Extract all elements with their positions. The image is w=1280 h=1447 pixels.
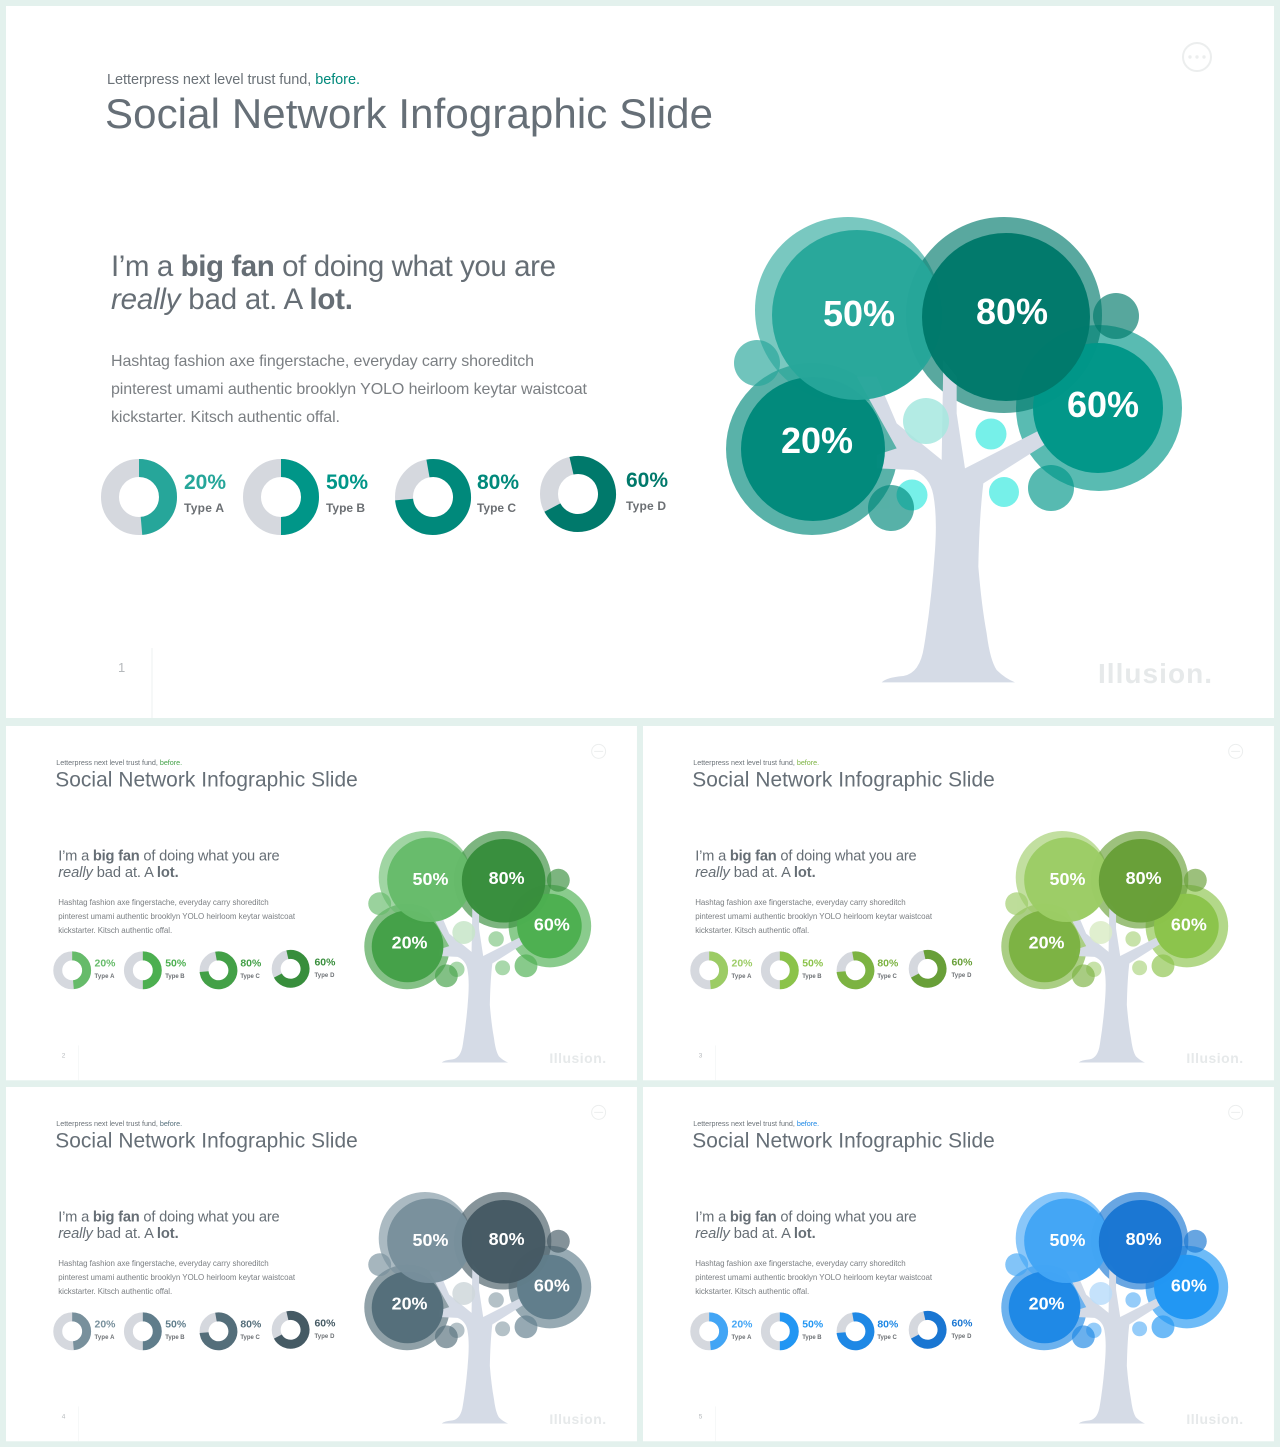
chart: donut type C 80%: Type C [240,1335,260,1341]
chart: donut type B 50% [128,956,186,985]
text: body paragraph [695,898,933,935]
panel: slide 5 blue [643,1087,1274,1441]
text: body paragraph: pinterest umami authentic brooklyn YOLO heirloom keytar waistcoat [695,1273,933,1282]
text: brand: Illusion. [1186,1411,1243,1427]
text: page number: 2 [62,1052,66,1059]
heading: statement: I’m a big fan of doing what you are [111,250,556,283]
panel: slide 2 green [6,726,637,1080]
heading: slide title: Social Network Infographic Slide [55,769,358,792]
heading: statement: I’m a big fan of doing what you are [695,1209,917,1225]
bubble 60% [1154,1255,1219,1319]
tree trunk [1066,902,1161,1063]
text: page number: 4 [62,1413,66,1420]
heading: statement: really bad at. A lot. [58,1226,179,1242]
tree trunk [429,1263,524,1424]
chart: donut type D 60%: Type D [626,499,666,513]
icon: more menu [1183,43,1211,71]
percent labels: 80% [1126,868,1162,888]
outer rings [364,1192,591,1350]
bubble 20% [741,377,885,521]
text: body paragraph: kickstarter. Kitsch authentic offal. [111,409,340,426]
panel: slide 4 blue grey [6,1087,637,1441]
bubble 50% [1024,837,1109,922]
chart: donut type A 20%: Type A [95,1335,115,1341]
percent labels: 50% [1050,869,1085,889]
chart: donut type D 60%: Type D [315,1334,335,1340]
text: body paragraph [695,1259,933,1296]
chart: donut type C 80%: Type C [240,974,260,980]
text: body paragraph: kickstarter. Kitsch authentic offal. [695,926,809,935]
text: eyebrow: Letterpress next level trust fund, before. [56,1119,182,1128]
light bubbles [1086,1282,1147,1338]
chart: donut type A 20%: Type A [732,1335,752,1341]
small bubbles [368,1230,570,1348]
chart: donut type B 50%: 50% [802,958,823,969]
text: brand: Illusion. [1186,1050,1243,1066]
percent labels: 20% [1029,932,1065,952]
outer rings [726,217,1182,535]
percent labels: 50% [823,293,895,334]
chart: donut type A 20%: 20% [95,1319,115,1330]
text: body paragraph: kickstarter. Kitsch authentic offal. [58,1287,172,1296]
chart: donut type C 80% [839,954,898,987]
heading: slide title: Social Network Infographic Slide [692,1130,995,1153]
chart: donut type D 60% [273,952,335,986]
percent labels: 60% [534,1276,570,1296]
chart: donut type A 20% [58,1317,115,1346]
chart: donut type C 80%: 80% [240,1319,261,1330]
text: eyebrow: Letterpress next level trust fund, before. [56,758,182,767]
text: brand: Illusion. [1098,658,1212,689]
chart: donut type B 50%: Type B [165,974,185,980]
percent labels [392,1229,570,1313]
chart: donut type B 50% [252,468,368,526]
percent labels: 60% [1171,915,1207,935]
text: page number: 5 [699,1413,703,1420]
heading: statement [58,1209,280,1242]
percent labels: 50% [413,1230,448,1250]
outer rings [364,831,591,989]
chart: donut type B 50%: 50% [802,1319,823,1330]
percent labels [1029,1229,1207,1313]
small bubbles [734,293,1139,531]
percent labels: 80% [489,868,525,888]
text: body paragraph: kickstarter. Kitsch authentic offal. [695,1287,809,1296]
chart: donut type A 20%: Type A [184,501,224,515]
small bubbles [1005,1230,1207,1348]
chart: donut type C 80%: 80% [877,958,898,969]
chart: donut type D 60%: 60% [626,469,668,492]
percent labels: 20% [1029,1293,1065,1313]
chart: donut type C 80% [202,954,261,987]
heading: statement: really bad at. A lot. [695,1226,816,1242]
chart: tree of percentages [726,217,1182,682]
heading: statement [695,848,917,881]
tree trunk [857,360,1047,682]
panel: slide 1 teal (large) [6,6,1274,718]
bubble 20% [1009,1272,1080,1343]
percent labels: 20% [781,420,853,461]
chart: tree of percentages [364,1192,591,1424]
chart: donut type A 20%: 20% [95,958,115,969]
text: body paragraph [111,353,588,426]
chart: donut type D 60%: 60% [952,1318,972,1329]
chart: tree of percentages [364,831,591,1063]
chart: donut type D 60%: 60% [952,957,972,968]
bubble 20% [372,1272,443,1343]
tree trunk [429,902,524,1063]
bubble 80% [922,233,1090,401]
chart: donut type B 50%: 50% [326,471,368,494]
bubble 20% [1009,911,1080,982]
chart: donut type A 20%: 20% [732,1319,752,1330]
chart: donut type B 50% [765,956,823,985]
icon: more menu [1229,1105,1243,1119]
percent labels: 80% [1126,1229,1162,1249]
percent labels: 80% [489,1229,525,1249]
text: eyebrow: Letterpress next level trust fund, before. [107,72,360,88]
percent labels [781,291,1139,461]
light bubbles [896,398,1019,510]
bubble 60% [1154,894,1219,958]
chart: donut type C 80%: 80% [240,958,261,969]
chart: donut type A 20% [58,956,115,985]
bubble 50% [387,1198,472,1283]
chart: donut type C 80%: 80% [477,471,519,494]
text: page number: 3 [699,1052,703,1059]
chart: donut type A 20%: Type A [95,974,115,980]
chart: donut type B 50% [765,1317,823,1346]
panel: slide 3 light green [643,726,1274,1080]
percent labels: 60% [1171,1276,1207,1296]
text: body paragraph: pinterest umami authentic brooklyn YOLO heirloom keytar waistcoat [111,381,588,398]
bubble 50% [387,837,472,922]
chart: donut type A 20%: Type A [732,974,752,980]
percent labels [392,868,570,952]
icon: more menu [1229,744,1243,758]
outer rings [1001,831,1228,989]
text: body paragraph: Hashtag fashion axe fingerstache, everyday carry shoreditch [111,353,534,370]
text: body paragraph: Hashtag fashion axe fingerstache, everyday carry shoreditch [58,1259,269,1268]
chart: donut type C 80% [202,1315,261,1348]
small bubbles [368,869,570,987]
text: eyebrow: Letterpress next level trust fund, before. [693,758,819,767]
chart: donut type B 50%: Type B [802,1335,822,1341]
chart: donut type A 20%: 20% [184,471,226,494]
chart: donut type D 60%: Type D [952,973,972,979]
chart: donut type D 60%: Type D [315,973,335,979]
heading: slide title: Social Network Infographic Slide [692,769,995,792]
chart: donut type B 50%: Type B [165,1335,185,1341]
chart: donut type A 20%: 20% [732,958,752,969]
text: body paragraph: Hashtag fashion axe fingerstache, everyday carry shoreditch [695,898,906,907]
heading: slide title: Social Network Infographic Slide [55,1130,358,1153]
percent labels: 20% [392,1293,428,1313]
text: eyebrow: Letterpress next level trust fund, before. [693,1119,819,1128]
chart: donut type A 20% [695,1317,752,1346]
chart: donut type B 50%: Type B [802,974,822,980]
chart: donut type C 80%: Type C [877,974,897,980]
chart: donut type D 60% [273,1313,335,1347]
chart: tree of percentages [1001,1192,1228,1424]
bubble 60% [517,894,582,958]
chart: donut type D 60%: 60% [315,957,335,968]
heading: slide title: Social Network Infographic Slide [105,90,713,137]
heading: statement: I’m a big fan of doing what you are [58,848,280,864]
chart: tree of percentages [1001,831,1228,1063]
percent labels: 80% [976,291,1048,332]
text: body paragraph: pinterest umami authentic brooklyn YOLO heirloom keytar waistcoat [58,1273,296,1282]
small bubbles [1005,869,1207,987]
text: page number: 1 [118,660,125,675]
icon: more menu [592,744,606,758]
chart: donut type D 60%: 60% [315,1318,335,1329]
chart: donut type D 60% [543,459,668,529]
chart: donut type C 80%: Type C [877,1335,897,1341]
text: body paragraph [58,1259,296,1296]
text: body paragraph: pinterest umami authentic brooklyn YOLO heirloom keytar waistcoat [695,912,933,921]
bubble 80% [462,1200,545,1284]
percent labels: 20% [392,932,428,952]
bubble 80% [462,839,545,923]
chart: donut type C 80% [839,1315,898,1348]
bubble 80% [1099,1200,1182,1284]
light bubbles [1086,921,1147,977]
bubble 60% [517,1255,582,1319]
text: body paragraph [58,898,296,935]
percent labels: 50% [413,869,448,889]
chart: donut type C 80% [399,463,519,531]
heading: statement [111,250,556,316]
light bubbles [449,1282,510,1338]
chart: donut type D 60% [910,952,972,986]
heading: statement: really bad at. A lot. [58,865,179,881]
heading: statement: I’m a big fan of doing what you are [58,1209,280,1225]
chart: donut type B 50% [128,1317,186,1346]
text: body paragraph: kickstarter. Kitsch authentic offal. [58,926,172,935]
bubble 50% [1024,1198,1109,1283]
percent labels: 60% [534,915,570,935]
text: body paragraph: pinterest umami authentic brooklyn YOLO heirloom keytar waistcoat [58,912,296,921]
chart: donut type A 20% [695,956,752,985]
chart: donut type C 80%: 80% [877,1319,898,1330]
chart: donut type B 50%: Type B [326,501,365,515]
chart: donut type A 20% [110,468,226,526]
text: brand: Illusion. [549,1411,606,1427]
text: body paragraph: Hashtag fashion axe fingerstache, everyday carry shoreditch [695,1259,906,1268]
chart: donut type B 50%: 50% [165,958,186,969]
bubble 60% [1033,343,1163,473]
tree trunk [1066,1263,1161,1424]
text: body paragraph: Hashtag fashion axe fingerstache, everyday carry shoreditch [58,898,269,907]
percent labels: 50% [1050,1230,1085,1250]
heading: statement: really bad at. A lot. [111,283,353,316]
heading: statement [695,1209,917,1242]
bubble 20% [372,911,443,982]
text: brand: Illusion. [549,1050,606,1066]
light bubbles [449,921,510,977]
bubble 50% [772,230,942,400]
chart: donut type B 50%: 50% [165,1319,186,1330]
heading: statement [58,848,280,881]
outer rings [1001,1192,1228,1350]
percent labels: 60% [1067,384,1139,425]
percent labels [1029,868,1207,952]
heading: statement: really bad at. A lot. [695,865,816,881]
icon: more menu [592,1105,606,1119]
bubble 80% [1099,839,1182,923]
heading: statement: I’m a big fan of doing what you are [695,848,917,864]
chart: donut type D 60%: Type D [952,1334,972,1340]
chart: donut type D 60% [910,1313,972,1347]
chart: donut type C 80%: Type C [477,501,516,515]
